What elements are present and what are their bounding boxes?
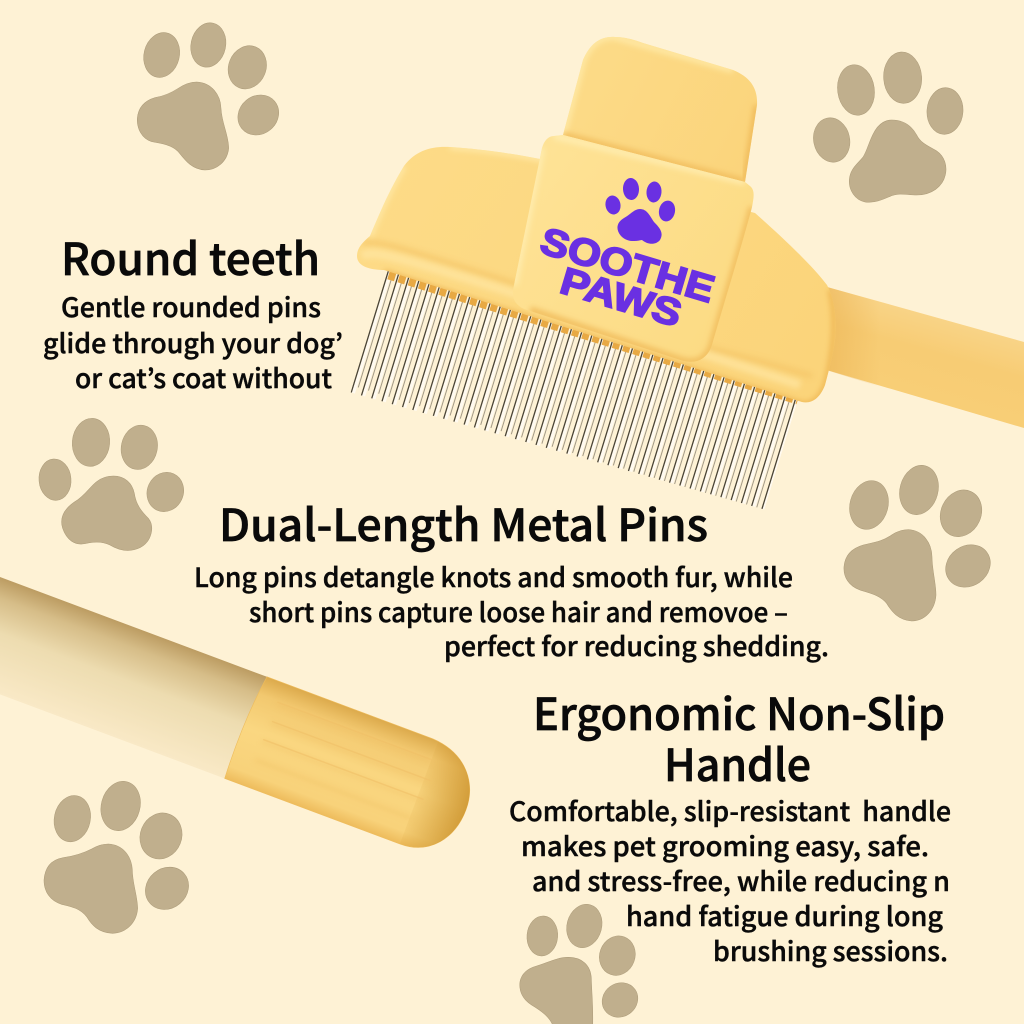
icon: paw print top left	[137, 20, 287, 170]
heading: ergonomic non-slip handle	[533, 679, 945, 794]
handle grip piece bottom left	[0, 563, 485, 861]
brush: comb head back plate	[357, 147, 836, 404]
text block: ergonomic handle: hand fatigue during long	[626, 895, 943, 934]
text block: dual-length metal pins: Long pins detangle knots and smooth fur, while	[194, 556, 793, 595]
logo: wordmark: PAWS	[555, 260, 686, 336]
text block: round teeth: or cat’s coat without	[75, 357, 332, 396]
text block: round teeth: Gentle rounded pins	[61, 286, 321, 325]
text block: ergonomic handle: brushing sessions.	[713, 930, 948, 969]
icon: paw print middle left	[37, 417, 190, 550]
grip ribs	[256, 704, 436, 820]
handle grip end	[224, 675, 485, 861]
handle shaft	[0, 563, 268, 780]
brush: front cover with logo	[513, 135, 754, 362]
text block: ergonomic handle: makes pet grooming easy, safe.	[521, 825, 929, 864]
heading: dual-length metal pins: Dual-Length Metal Pins	[219, 490, 708, 554]
brush: upper neck	[563, 37, 757, 182]
text block: ergonomic handle	[509, 790, 951, 969]
brush: metal pins	[369, 274, 798, 457]
text block: round teeth: glide through your dog’	[43, 322, 343, 361]
grip cap shading	[394, 739, 485, 861]
icon: paw print middle right	[844, 461, 999, 621]
icon: paw print bottom left	[44, 777, 197, 933]
logo: wordmark: SOOTHE	[535, 220, 719, 311]
heading: round teeth: Round teeth	[61, 224, 320, 288]
icon: paw print bottom center	[520, 900, 645, 1024]
text block: round teeth	[43, 286, 343, 396]
text block: dual-length metal pins: perfect for reducing shedding.	[444, 625, 829, 664]
logo: wordmark	[535, 220, 719, 336]
text block: dual-length metal pins	[194, 556, 829, 664]
icon: paw print top right	[809, 51, 965, 202]
heading: ergonomic non-slip handle: Ergonomic Non-Slip	[533, 679, 945, 743]
cover edge shading	[514, 136, 752, 362]
logo: purple paw	[604, 178, 677, 244]
brush: handle on right	[820, 285, 1024, 428]
text block: ergonomic handle: and stress-free, while reducing n	[532, 860, 950, 899]
text block: dual-length metal pins: short pins capture loose hair and removoe –	[249, 591, 788, 630]
heading: ergonomic non-slip handle: Handle	[664, 730, 811, 794]
text block: ergonomic handle: Comfortable, slip-resistant handle	[509, 790, 951, 829]
